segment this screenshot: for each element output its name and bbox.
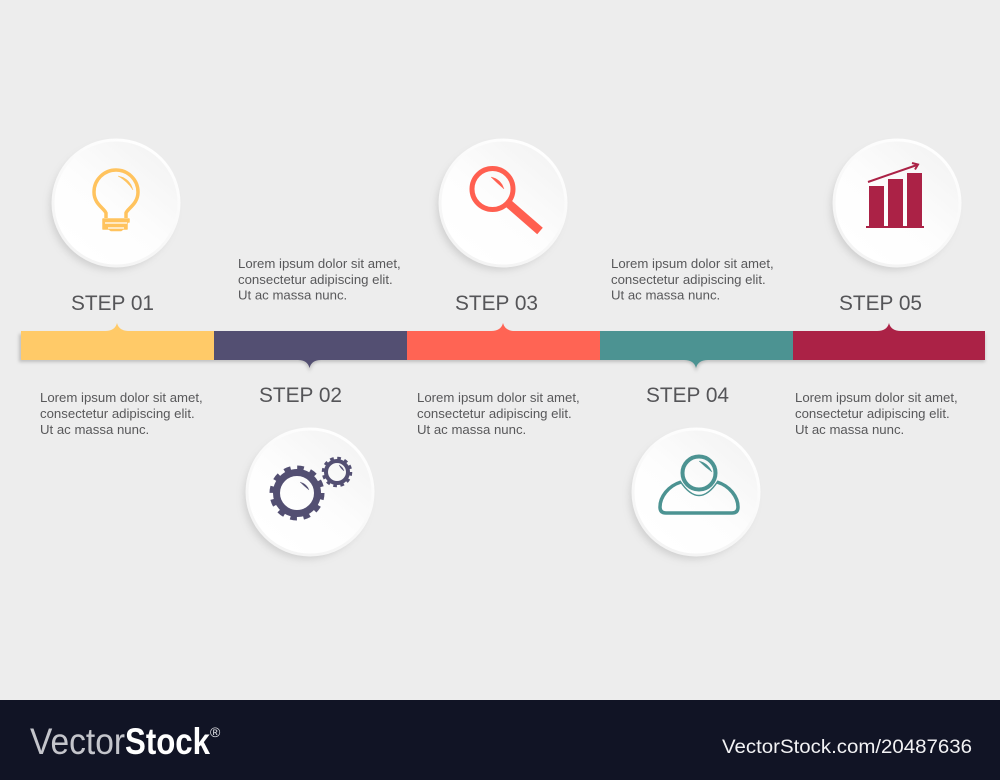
icon: light bulb bbox=[94, 170, 138, 230]
text block: step 04: Ut ac massa nunc. bbox=[611, 288, 720, 302]
icon: bar chart with arrow bbox=[866, 163, 924, 228]
footer image id: VectorStock.com/20487636 bbox=[722, 737, 972, 758]
step 04 circle with person icon bbox=[630, 428, 760, 559]
text block: step 03: Lorem ipsum dolor sit amet, bbox=[417, 390, 580, 405]
step 01 circle with bulb icon bbox=[50, 138, 180, 270]
label: step 04: STEP 04 bbox=[646, 384, 729, 407]
label: step 01: STEP 01 bbox=[71, 292, 154, 315]
footer logo: Vector bbox=[30, 721, 125, 762]
segment: step 05 bbox=[793, 323, 985, 360]
step 05 circle with chart icon bbox=[831, 138, 962, 270]
segment: step 04 bbox=[600, 331, 793, 368]
segment: step 02 bbox=[214, 331, 407, 368]
footer band bbox=[0, 700, 1000, 780]
text block: step 02 bbox=[238, 256, 401, 302]
text block: step 05: consectetur adipiscing elit. bbox=[795, 406, 950, 421]
text block: step 01 bbox=[40, 390, 203, 437]
text block: step 01: Lorem ipsum dolor sit amet, bbox=[40, 390, 203, 405]
label: step 03: STEP 03 bbox=[455, 292, 538, 315]
text block: step 03 bbox=[417, 390, 580, 437]
text block: step 02: consectetur adipiscing elit. bbox=[238, 272, 393, 287]
text block: step 04: Lorem ipsum dolor sit amet, bbox=[611, 256, 774, 271]
step 03 circle with magnifier icon bbox=[437, 138, 568, 270]
text block: step 02: Ut ac massa nunc. bbox=[238, 288, 347, 302]
text block: step 04 bbox=[611, 256, 774, 302]
text block: step 01: consectetur adipiscing elit. bbox=[40, 406, 195, 421]
text block: step 05: Lorem ipsum dolor sit amet, bbox=[795, 390, 958, 405]
footer logo: Stock bbox=[125, 721, 210, 762]
text block: step 05 bbox=[795, 390, 958, 437]
text block: step 01: Ut ac massa nunc. bbox=[40, 422, 149, 437]
text block: step 04: consectetur adipiscing elit. bbox=[611, 272, 766, 287]
step 02 circle with gears icon bbox=[244, 428, 374, 559]
icon: magnifying glass bbox=[472, 168, 540, 231]
text block: step 05: Ut ac massa nunc. bbox=[795, 422, 904, 437]
footer logo: ® bbox=[210, 724, 221, 740]
text block: step 03: consectetur adipiscing elit. bbox=[417, 406, 572, 421]
segment: step 03 bbox=[407, 323, 600, 360]
icon: gears bbox=[272, 458, 350, 518]
footer logo bbox=[30, 721, 221, 762]
icon: person bbox=[660, 456, 738, 513]
label: step 05: STEP 05 bbox=[839, 292, 922, 315]
label: step 02: STEP 02 bbox=[259, 384, 342, 407]
segment: step 01 bbox=[21, 323, 214, 360]
text block: step 02: Lorem ipsum dolor sit amet, bbox=[238, 256, 401, 271]
text block: step 03: Ut ac massa nunc. bbox=[417, 422, 526, 437]
timeline bar bbox=[19, 323, 985, 372]
